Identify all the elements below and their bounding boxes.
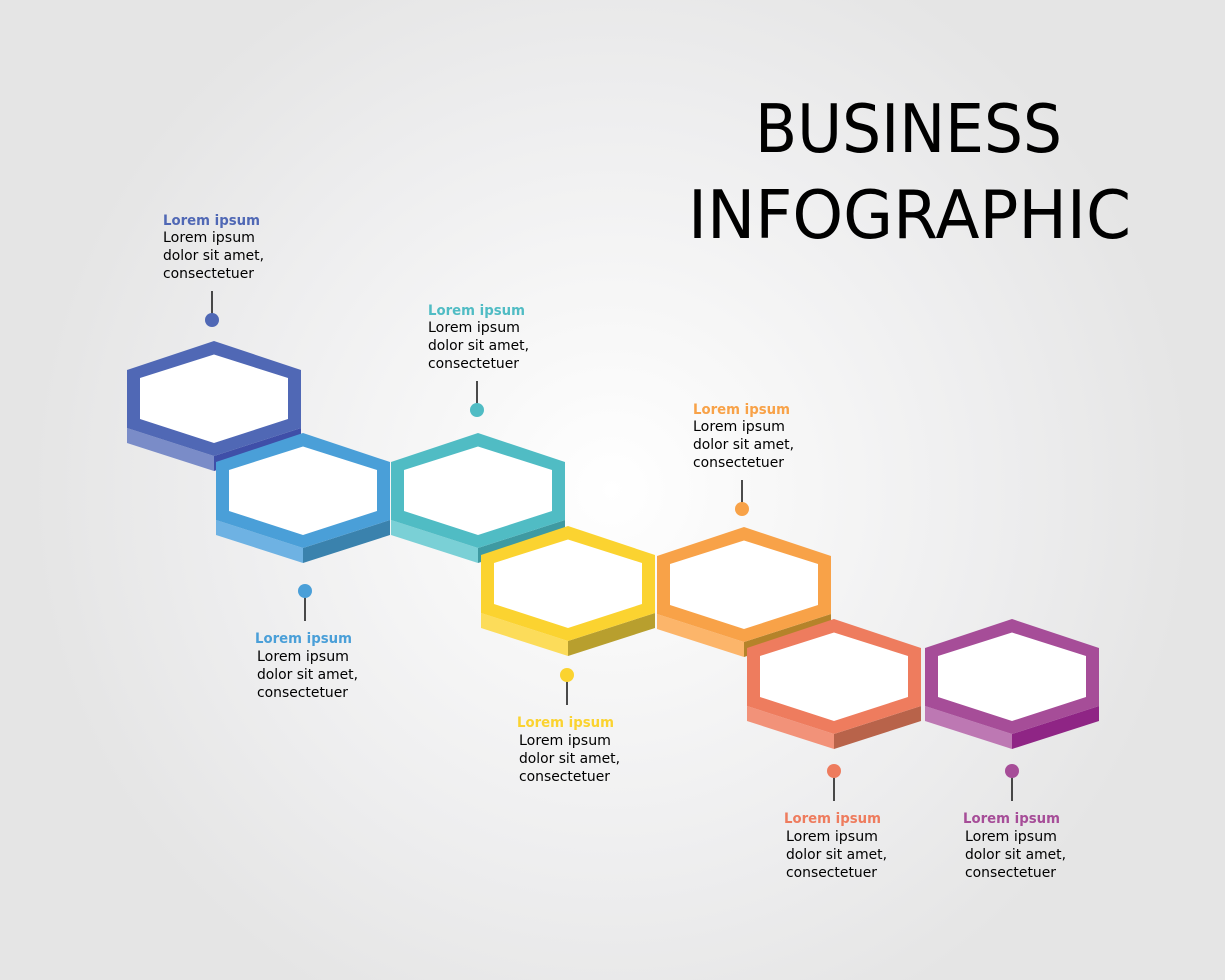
text block 6: dolor sit amet, (786, 847, 887, 863)
text block 3: consectetuer (428, 356, 519, 372)
pin 1 (205, 291, 219, 327)
pin 4 (560, 668, 574, 705)
text block 1: dolor sit amet, (163, 248, 264, 264)
text block 6: consectetuer (786, 865, 877, 881)
text block 1: Lorem ipsum (163, 213, 260, 229)
text block 3: Lorem ipsum (428, 320, 520, 336)
text block 7: Lorem ipsum (965, 829, 1057, 845)
text block 3 (428, 303, 529, 372)
text block 4: dolor sit amet, (519, 751, 620, 767)
hexagon 7: purple (925, 619, 1099, 749)
text block 1: Lorem ipsum (163, 230, 255, 246)
pin 3 (470, 381, 484, 417)
text block 7: dolor sit amet, (965, 847, 1066, 863)
pin 5 (735, 480, 749, 516)
pin 2 (298, 584, 312, 621)
text block 4: Lorem ipsum (519, 733, 611, 749)
pin 6 (827, 764, 841, 801)
text block 7: Lorem ipsum (963, 811, 1060, 827)
title: INFOGRAPHIC (688, 176, 1131, 254)
text block 6: Lorem ipsum (786, 829, 878, 845)
hexagon 2: blue (216, 433, 390, 563)
text block 5: dolor sit amet, (693, 437, 794, 453)
text block 5: Lorem ipsum (693, 402, 790, 418)
text block 6 (784, 811, 887, 881)
text block 3: dolor sit amet, (428, 338, 529, 354)
text block 5 (693, 402, 794, 471)
text block 2: consectetuer (257, 685, 348, 701)
text block 2: Lorem ipsum (255, 631, 352, 647)
hexagon 5: orange (657, 527, 831, 657)
hexagon 6: coral (747, 619, 921, 749)
hexagon 1: indigo (127, 341, 301, 471)
text block 4: Lorem ipsum (517, 715, 614, 731)
hexagon 3: teal (391, 433, 565, 563)
title: BUSINESS (755, 90, 1062, 168)
text block 7 (963, 811, 1066, 881)
hexagon 4: yellow (481, 526, 655, 656)
text block 2: dolor sit amet, (257, 667, 358, 683)
text block 2: Lorem ipsum (257, 649, 349, 665)
text block 3: Lorem ipsum (428, 303, 525, 319)
text block 4: consectetuer (519, 769, 610, 785)
text block 1: consectetuer (163, 266, 254, 282)
text block 2 (255, 631, 358, 701)
text block 5: Lorem ipsum (693, 419, 785, 435)
text block 5: consectetuer (693, 455, 784, 471)
text block 7: consectetuer (965, 865, 1056, 881)
text block 4 (517, 715, 620, 785)
title (688, 90, 1131, 254)
text block 6: Lorem ipsum (784, 811, 881, 827)
text block 1 (163, 213, 264, 282)
pin 7 (1005, 764, 1019, 801)
